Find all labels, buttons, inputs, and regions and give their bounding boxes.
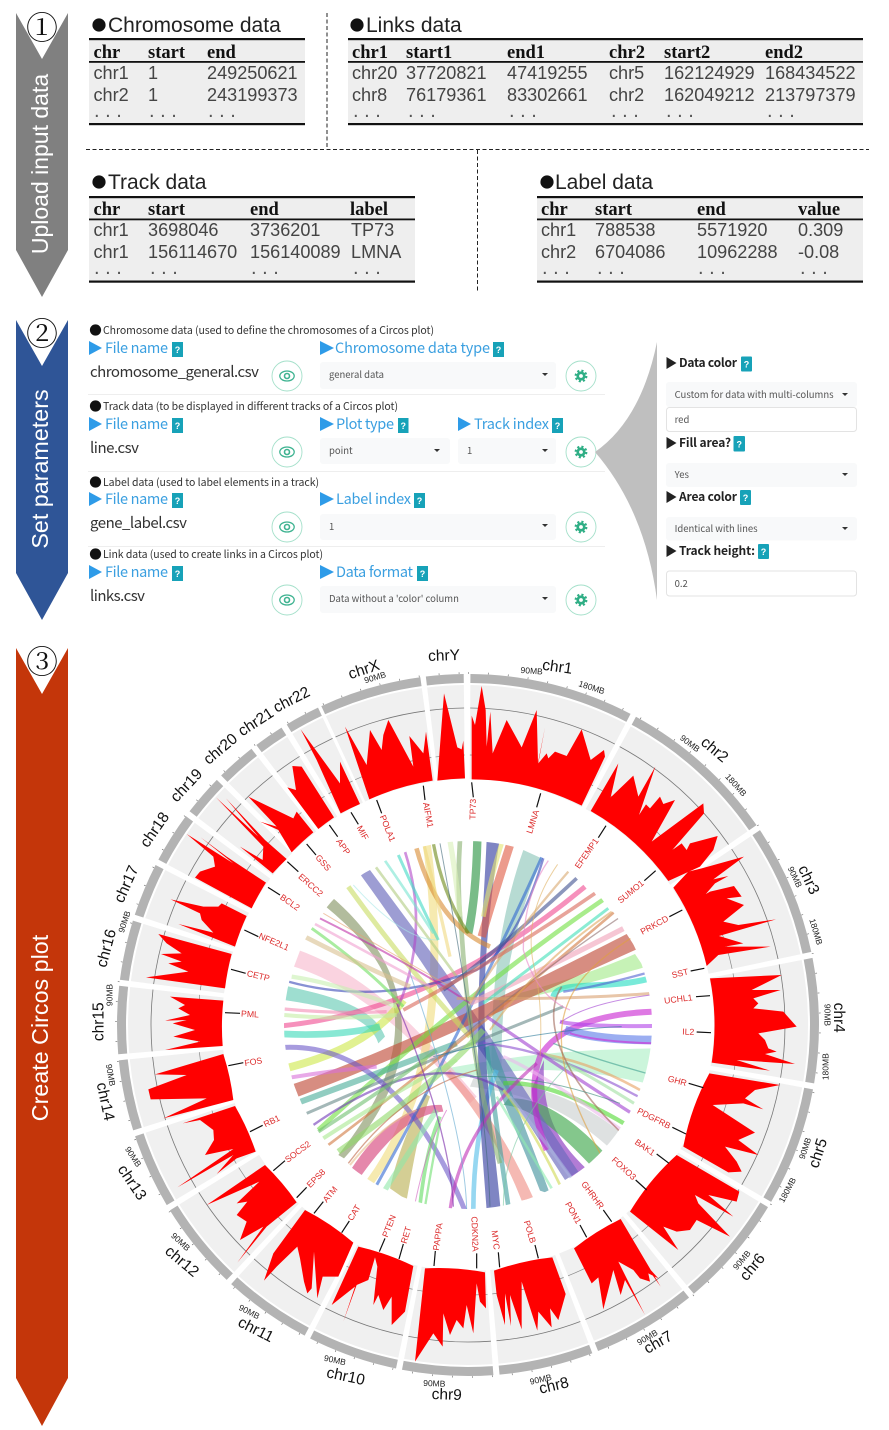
table: links data: . . . bbox=[509, 100, 537, 122]
Circos plot: chromosome names: chrY bbox=[428, 647, 460, 665]
form panel: link data parameters: ? bbox=[175, 569, 180, 579]
Circos plot: gene labels: GSS bbox=[313, 853, 333, 873]
Circos plot: gene labels: UCHL1 bbox=[664, 992, 693, 1006]
Circos plot: chromosome names: chr13 bbox=[114, 1162, 150, 1204]
Circos plot: megabase scale labels: 90MB bbox=[169, 1230, 192, 1253]
table: links data: end1 bbox=[507, 43, 545, 63]
table: track data: chr1 bbox=[94, 242, 129, 262]
table: links data: 213797379 bbox=[765, 85, 856, 105]
table: label data: 5571920 bbox=[697, 220, 767, 240]
table: label data: 6704086 bbox=[595, 242, 665, 262]
form panel: track data parameters: Plot type bbox=[336, 413, 394, 434]
form panel: chromosome data parameters: File name bbox=[105, 337, 168, 358]
Circos plot: gene labels: CETP bbox=[246, 968, 271, 983]
form panel: label data parameters: gene_label.csv bbox=[90, 512, 187, 533]
table: track data: start bbox=[148, 200, 186, 220]
table: chromosome data: start bbox=[148, 43, 186, 63]
Circos plot: gene labels: ERCC2 bbox=[296, 871, 325, 899]
Circos plot: gene labels: PML bbox=[241, 1009, 259, 1019]
Circos plot: chromosome names: chr9 bbox=[431, 1386, 462, 1404]
Circos plot: chromosome names: chr1 bbox=[541, 657, 573, 678]
Circos plot: chromosome names: chr21 bbox=[235, 705, 277, 740]
form panel: chromosome data parameters: Chromosome data type bbox=[335, 337, 490, 358]
form panel: track data parameters: ? bbox=[555, 421, 560, 431]
Circos plot: red area track, lower left sectors chr9 to chr14 bbox=[148, 1054, 486, 1362]
Circos plot: chromosome names: chr14 bbox=[93, 1081, 117, 1123]
table: label data: Label data bbox=[555, 171, 653, 194]
Circos plot: megabase scale labels: 90MB bbox=[797, 1136, 813, 1160]
Circos plot: megabase scale labels: 90MB bbox=[104, 1063, 118, 1087]
Circos plot: chromosome names: chr6 bbox=[736, 1250, 769, 1284]
form panel: label data parameters: Label data (used to label elements in a track) bbox=[103, 475, 319, 490]
Circos plot: megabase scale labels: 90MB bbox=[423, 1378, 446, 1389]
Circos plot: chromosome names: chr3 bbox=[794, 863, 822, 897]
table: links data: 76179361 bbox=[406, 85, 487, 105]
table: label data: . . . bbox=[698, 257, 726, 279]
table: links data: chr1 bbox=[352, 43, 388, 63]
Circos plot: track rings bbox=[116, 673, 820, 1377]
panel: track settings: Area color bbox=[678, 488, 738, 505]
table: label data: 10962288 bbox=[697, 242, 778, 262]
Circos plot: chromosome names: chr2 bbox=[697, 734, 731, 766]
form panel: label data parameters: Label index bbox=[336, 488, 411, 509]
table: track data: 3698046 bbox=[148, 220, 218, 240]
Circos plot: megabase scale labels: 90MB bbox=[731, 1248, 753, 1272]
arrow: step 3 create Circos plot: Create Circos plot bbox=[27, 934, 53, 1121]
Circos plot: gene labels: GHRHR bbox=[579, 1179, 606, 1211]
Circos plot: gene labels: SUMO1 bbox=[616, 878, 646, 905]
form panel: chromosome data parameters: general data bbox=[329, 367, 384, 381]
Circos plot: chromosome names: chr4 bbox=[830, 1003, 847, 1033]
table: chromosome data: 1 bbox=[148, 85, 158, 105]
table: links data: . . . bbox=[666, 100, 694, 122]
Circos plot: red area track, lower right sectors chr5 to chr8 bbox=[494, 1073, 780, 1331]
form panel: link data parameters: Data without a 'color' column bbox=[329, 591, 459, 605]
panel: track settings: Custom for data with multi-columns bbox=[675, 387, 834, 401]
Circos plot: chromosome names: chr22 bbox=[271, 684, 313, 716]
Circos plot: gene labels: PAPPA bbox=[431, 1222, 445, 1251]
table: links data: . . . bbox=[767, 100, 795, 122]
Circos plot: chromosome names bbox=[90, 647, 847, 1404]
Circos plot: chromosome names: chr15 bbox=[90, 1002, 108, 1041]
Circos plot: chromosome names: chrX bbox=[346, 657, 382, 683]
Circos plot: megabase scale labels: 90MB bbox=[635, 1327, 660, 1347]
form panel: track data parameters: Track data (to be displayed in different tracks of a Circos plot) bbox=[103, 399, 398, 414]
panel: track settings: red bbox=[675, 412, 689, 426]
Circos plot: gene labels: GHR bbox=[667, 1073, 688, 1088]
Circos plot: gene labels bbox=[241, 799, 695, 1252]
Circos plot: gene labels: NFE2L1 bbox=[257, 931, 291, 953]
table: label data: . . . bbox=[800, 257, 828, 279]
Circos plot: megabase scale labels: 90MB bbox=[786, 865, 804, 889]
Circos plot: megabase scale labels: 180MB bbox=[807, 917, 825, 946]
table: links data: . . . bbox=[408, 100, 436, 122]
table: chromosome data: chr2 bbox=[94, 85, 129, 105]
Circos plot: megabase scale labels bbox=[104, 665, 832, 1389]
Circos plot: chord links bbox=[283, 839, 653, 1211]
table: track data: 3736201 bbox=[250, 220, 320, 240]
dashed dividers between data tables bbox=[86, 13, 869, 293]
Circos plot: megabase scale labels: 90MB bbox=[104, 984, 114, 1006]
panel: track settings bbox=[666, 354, 857, 596]
table: chromosome data: . . . bbox=[149, 100, 177, 122]
form panel: label data parameters: 1 bbox=[329, 519, 334, 533]
Circos plot: gene labels: RET bbox=[399, 1225, 413, 1245]
Circos plot: gene labels: AIFM1 bbox=[421, 801, 436, 829]
Circos plot: chromosome names: chr7 bbox=[641, 1328, 676, 1358]
Circos plot: gene labels: BAK1 bbox=[633, 1137, 657, 1158]
panel: track settings: ? bbox=[743, 493, 748, 503]
table: links data: . . . bbox=[353, 100, 381, 122]
form panel: link data parameters: ? bbox=[420, 569, 425, 579]
Circos plot: gene labels: MYC bbox=[490, 1230, 502, 1250]
Circos plot: gene labels: EPS8 bbox=[305, 1167, 327, 1190]
Circos plot: gene labels: POLA1 bbox=[378, 813, 398, 843]
table: track data: end bbox=[250, 200, 280, 220]
table: track data: . . . bbox=[150, 257, 178, 279]
table: links data: Links data bbox=[366, 14, 462, 37]
arrow: step 2 set parameters: ② bbox=[26, 309, 58, 355]
Circos plot: megabase scale labels: 180MB bbox=[723, 772, 749, 799]
form panel: track data parameters: ? bbox=[400, 421, 406, 431]
arrow: step 3 create Circos plot: ③ bbox=[26, 637, 58, 683]
table: chromosome data: Chromosome data bbox=[108, 14, 281, 37]
Circos plot: gene labels: FOS bbox=[244, 1055, 263, 1068]
panel: track settings: Yes bbox=[674, 467, 689, 481]
form panel: link data parameters bbox=[89, 547, 596, 615]
Circos plot: gene labels: RB1 bbox=[262, 1113, 282, 1129]
Circos plot: megabase scale labels: 180MB bbox=[777, 1175, 798, 1204]
Circos plot: megabase scale labels: 90MB bbox=[123, 1145, 144, 1169]
form panel: label data parameters bbox=[88, 475, 605, 547]
Circos plot: megabase scale labels: 90MB bbox=[822, 1004, 832, 1026]
Circos plot: megabase scale labels: 180MB bbox=[577, 678, 606, 696]
table: links data: 83302661 bbox=[507, 85, 588, 105]
table: track data bbox=[89, 171, 415, 283]
table: chromosome data: end bbox=[207, 43, 236, 63]
Circos plot: chromosome names: chr16 bbox=[93, 927, 120, 969]
Circos plot: megabase scale labels: 90MB bbox=[363, 669, 387, 685]
table: links data: chr2 bbox=[609, 85, 644, 105]
Circos plot: gene labels: LMNA bbox=[524, 808, 541, 835]
table: links data: 37720821 bbox=[406, 63, 487, 83]
Circos plot: chromosome names: chr12 bbox=[161, 1243, 202, 1281]
funnel: expands track settings bbox=[595, 342, 657, 600]
form panel: chromosome data parameters bbox=[88, 323, 605, 395]
panel: track settings: ? bbox=[744, 360, 749, 370]
table: links data: 162049212 bbox=[664, 85, 755, 105]
panel: track settings: Identical with lines bbox=[675, 521, 758, 535]
table: track data: 156140089 bbox=[250, 242, 341, 262]
Circos plot: gene labels: MIF bbox=[355, 824, 371, 842]
Circos plot: megabase scale labels: 90MB bbox=[237, 1302, 262, 1321]
Circos plot: gene labels: SOCS2 bbox=[283, 1139, 313, 1165]
table: chromosome data: 243199373 bbox=[207, 85, 298, 105]
Circos plot: gene labels: CAT bbox=[345, 1202, 363, 1222]
form panel: track data parameters: File name bbox=[105, 413, 168, 434]
Circos plot: gene labels: FOXO3 bbox=[610, 1155, 638, 1182]
Circos plot: megabase scale labels: 90MB bbox=[323, 1353, 347, 1367]
Circos plot: gene labels: POLB bbox=[522, 1219, 538, 1244]
panel: track settings: Fill area? bbox=[679, 434, 731, 451]
panel: track settings: Data color bbox=[679, 354, 738, 371]
arrow: step 2 set parameters bbox=[16, 309, 68, 620]
table: chromosome data: 249250621 bbox=[207, 63, 298, 83]
panel: track settings: Track height: bbox=[679, 542, 755, 559]
Circos plot: megabase scale labels: 90MB bbox=[520, 665, 543, 676]
table: label data bbox=[537, 171, 863, 283]
table: label data: end bbox=[697, 200, 726, 220]
table: label data: start bbox=[595, 200, 633, 220]
form panel: track data parameters bbox=[88, 399, 605, 472]
table: label data: 0.309 bbox=[798, 220, 843, 240]
Circos plot: chromosome names: chr5 bbox=[806, 1136, 831, 1170]
arrow: step 2 set parameters: Set parameters bbox=[27, 389, 53, 549]
form panel: link data parameters: Link data (used to create links in a Circos plot) bbox=[103, 547, 323, 562]
Circos plot: gene labels: SST bbox=[671, 966, 690, 980]
table: label data: chr bbox=[541, 200, 568, 220]
table: track data: 156114670 bbox=[148, 242, 237, 262]
table: label data: . . . bbox=[542, 257, 570, 279]
table: track data: label bbox=[350, 200, 388, 220]
table: links data: chr20 bbox=[352, 63, 397, 83]
Circos plot: chromosome names: chr10 bbox=[325, 1364, 367, 1389]
table: links data: start2 bbox=[664, 43, 710, 63]
form panel: track data parameters: ? bbox=[175, 421, 180, 431]
table: links data: 162124929 bbox=[664, 63, 755, 83]
Circos plot: gene labels: PON1 bbox=[563, 1200, 584, 1226]
table: label data: chr1 bbox=[541, 220, 576, 240]
Circos plot: chromosome names: chr18 bbox=[137, 809, 173, 851]
Circos plot: gene labels: CDKN2A bbox=[469, 1216, 481, 1252]
form panel: track data parameters: line.csv bbox=[90, 437, 139, 458]
table: chromosome data bbox=[89, 14, 305, 125]
table: track data: . . . bbox=[94, 257, 122, 279]
form panel: link data parameters: links.csv bbox=[90, 585, 145, 606]
panel: track settings: 0.2 bbox=[675, 576, 688, 590]
Circos plot: gene label leader lines bbox=[225, 782, 711, 1268]
form panel: track data parameters: Track index bbox=[474, 413, 549, 434]
Circos plot: gene labels: ATM bbox=[321, 1184, 339, 1204]
Circos plot: gene labels: PRKCD bbox=[639, 913, 670, 937]
table: label data: value bbox=[798, 200, 840, 220]
table: track data: Track data bbox=[108, 171, 207, 194]
Circos plot: gene labels: BCL2 bbox=[278, 892, 302, 913]
table: chromosome data: . . . bbox=[94, 100, 122, 122]
Circos plot: gene labels: APP bbox=[334, 837, 352, 857]
Circos plot: chromosome names: chr8 bbox=[537, 1374, 571, 1398]
table: links data: . . . bbox=[611, 100, 639, 122]
table: links data: chr5 bbox=[609, 63, 644, 83]
Circos plot: red area track, upper left sectors chr15 to chrX bbox=[146, 720, 433, 1050]
panel: track settings: ? bbox=[736, 440, 742, 450]
Circos plot: gene labels: PDGFRB bbox=[636, 1106, 673, 1131]
Circos plot: gene labels: EFEMP1 bbox=[573, 836, 601, 870]
table: links data: 168434522 bbox=[765, 63, 856, 83]
table: track data: . . . bbox=[353, 257, 381, 279]
table: links data: end2 bbox=[765, 43, 803, 63]
table: links data: start1 bbox=[406, 43, 452, 63]
Circos plot: chromosome names: chr17 bbox=[111, 863, 142, 905]
table: links data: chr2 bbox=[609, 43, 645, 63]
table: links data: 47419255 bbox=[507, 63, 588, 83]
table: chromosome data: chr bbox=[94, 43, 120, 63]
table: track data: LMNA bbox=[351, 242, 402, 262]
panel: track settings: ? bbox=[761, 547, 766, 557]
arrow: step 1 upload input data: Upload input data bbox=[27, 74, 53, 254]
form panel: link data parameters: Data format bbox=[336, 561, 414, 582]
form panel: label data parameters: ? bbox=[175, 496, 180, 506]
table: track data: chr1 bbox=[94, 220, 129, 240]
Circos plot: gene labels: IL2 bbox=[682, 1027, 695, 1037]
Circos plot: megabase scale labels: 90MB bbox=[116, 909, 133, 934]
Circos plot: red area track, upper right sectors chrY to chr4 bbox=[437, 686, 797, 1071]
table: track data: chr bbox=[94, 200, 120, 220]
table: label data: . . . bbox=[597, 257, 625, 279]
form panel: chromosome data parameters: chromosome_general.csv bbox=[90, 361, 259, 382]
Circos plot: gene labels: PTEN bbox=[380, 1213, 398, 1239]
form panel: chromosome data parameters: ? bbox=[496, 345, 501, 355]
table: track data: TP73 bbox=[351, 220, 394, 240]
table: chromosome data: chr1 bbox=[94, 63, 129, 83]
table: label data: -0.08 bbox=[798, 242, 839, 262]
form panel: label data parameters: ? bbox=[417, 496, 422, 506]
table: label data: 788538 bbox=[595, 220, 655, 240]
arrow: step 1 upload input data bbox=[16, 3, 68, 297]
Circos plot: megabase scale labels: 90MB bbox=[529, 1372, 553, 1387]
table: chromosome data: . . . bbox=[208, 100, 236, 122]
Circos plot: chromosome names: chr20 bbox=[200, 730, 241, 768]
Circos plot: chromosome names: chr19 bbox=[167, 766, 206, 806]
table: links data bbox=[348, 14, 863, 125]
table: label data: chr2 bbox=[541, 242, 576, 262]
Circos plot: gene labels: TP73 bbox=[467, 799, 478, 820]
form panel: track data parameters: point bbox=[329, 443, 353, 457]
form panel: track data parameters: 1 bbox=[467, 443, 472, 457]
table: track data: . . . bbox=[251, 257, 279, 279]
arrow: step 1 upload input data: ① bbox=[26, 3, 58, 49]
form panel: chromosome data parameters: Chromosome data (used to define the chromosomes of a Circos plot) bbox=[103, 323, 434, 338]
Circos plot: chromosome names: chr11 bbox=[235, 1314, 276, 1346]
form panel: label data parameters: File name bbox=[105, 488, 168, 509]
arrow: step 3 create Circos plot bbox=[16, 637, 68, 1426]
Circos plot: megabase scale labels: 90MB bbox=[678, 733, 702, 754]
form panel: link data parameters: File name bbox=[105, 561, 168, 582]
form panel: chromosome data parameters: ? bbox=[175, 345, 180, 355]
Circos plot: megabase scale labels: 180MB bbox=[821, 1053, 831, 1080]
table: chromosome data: 1 bbox=[148, 63, 158, 83]
table: links data: chr8 bbox=[352, 85, 387, 105]
